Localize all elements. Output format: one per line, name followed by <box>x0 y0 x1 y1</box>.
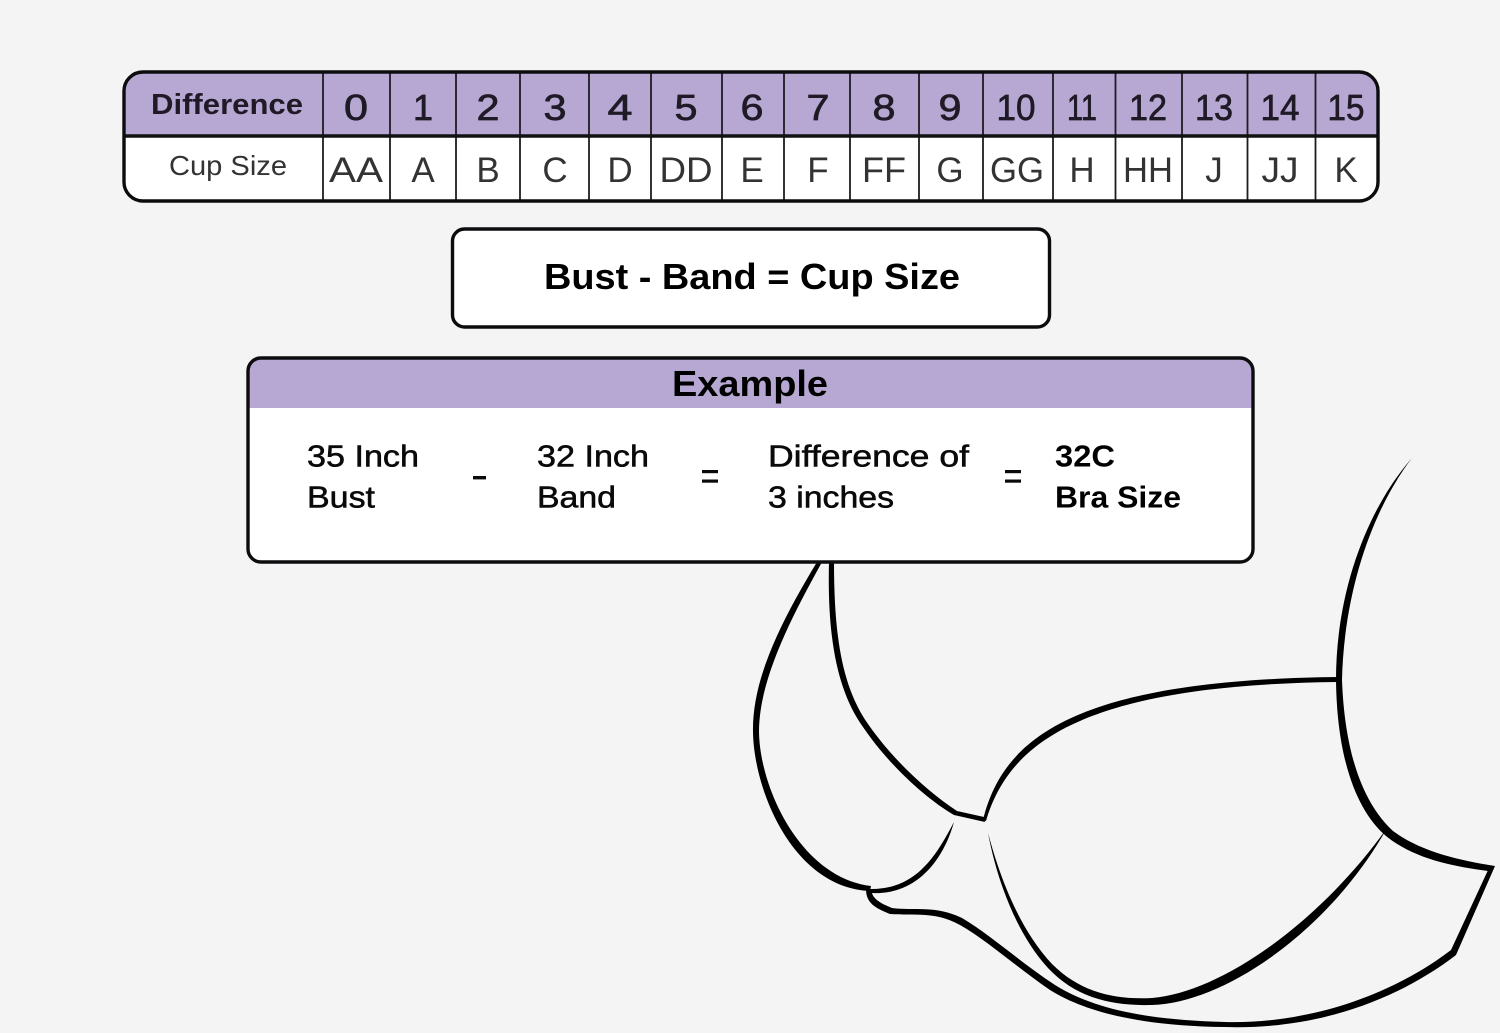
cup size values: D <box>607 151 633 190</box>
wing end and bottom band edge <box>866 866 1495 1027</box>
equals sign <box>702 470 718 483</box>
cup size values: J <box>1205 151 1223 190</box>
formula text: Bust - Band = Cup Size <box>544 256 960 297</box>
cup size values: F <box>807 151 829 190</box>
size chart table <box>124 72 1378 201</box>
example panel outline <box>248 358 1253 562</box>
header rule <box>124 134 1378 138</box>
difference values: 0 <box>344 87 368 128</box>
example panel background <box>248 358 1253 562</box>
difference result <box>768 438 969 514</box>
formula box outline <box>452 229 1050 327</box>
row heading: Cup Size: Cup Size <box>169 150 287 181</box>
cup size values: FF <box>862 151 906 190</box>
difference values: 9 <box>938 87 962 128</box>
cup size values: K <box>1334 151 1358 190</box>
cup size values: HH <box>1123 151 1173 190</box>
example heading: Example <box>672 363 828 404</box>
cup size values: B <box>476 151 500 190</box>
difference values: 7 <box>806 87 830 128</box>
formula box <box>452 229 1050 327</box>
left strap outer curve <box>753 562 871 891</box>
cup size values: E <box>740 151 764 190</box>
difference values: 8 <box>872 87 896 128</box>
difference values: 15 <box>1328 87 1364 128</box>
bra size result <box>1055 438 1181 514</box>
minus sign <box>473 476 486 479</box>
row heading: Difference: Difference <box>151 89 303 121</box>
table body background <box>124 72 1378 201</box>
cup size values: DD <box>660 151 712 190</box>
cup size values: AA <box>329 151 384 190</box>
cup size values <box>329 151 1358 190</box>
difference values: 3 <box>544 87 566 128</box>
cup size values: GG <box>990 151 1044 190</box>
right strap and side wing outer edge <box>1336 458 1495 871</box>
column dividers <box>323 72 1316 201</box>
band measurement: 32 Inch <box>537 438 649 474</box>
difference values: 6 <box>740 87 764 128</box>
cup size values: G <box>936 151 964 190</box>
difference values: 12 <box>1129 87 1167 128</box>
cup top edge <box>983 677 1338 821</box>
difference values: 5 <box>674 87 698 128</box>
cup size values: JJ <box>1262 151 1298 190</box>
difference values: 2 <box>476 87 500 128</box>
difference values: 11 <box>1067 87 1097 128</box>
left strap inner curve <box>829 562 985 822</box>
bust measurement: Bust <box>307 480 375 514</box>
small left cup curve <box>870 822 954 893</box>
table header band <box>124 72 1378 136</box>
bust measurement: 35 Inch <box>307 438 419 474</box>
inner cup lower curve <box>988 828 1387 1005</box>
cup size values: C <box>542 151 568 190</box>
band measurement: Band <box>537 480 616 514</box>
bust measurement <box>307 438 419 514</box>
difference values: 13 <box>1195 87 1233 128</box>
illustration: bra line drawing <box>753 458 1495 1027</box>
bra size result: Bra Size <box>1055 480 1181 514</box>
example panel <box>248 358 1253 562</box>
difference values: 14 <box>1260 87 1300 128</box>
table outline <box>124 72 1378 201</box>
difference result: 3 inches <box>768 480 894 514</box>
band measurement <box>537 438 649 514</box>
cup size values: A <box>411 151 435 190</box>
difference values: 10 <box>996 87 1036 128</box>
cup size values: H <box>1069 151 1095 190</box>
difference values: 4 <box>608 87 632 128</box>
example header band <box>248 358 1253 408</box>
equals sign <box>1005 470 1021 483</box>
bra size result: 32C <box>1055 438 1115 474</box>
difference values <box>344 87 1364 128</box>
difference result: Difference of <box>768 438 969 474</box>
difference values: 1 <box>413 87 433 128</box>
